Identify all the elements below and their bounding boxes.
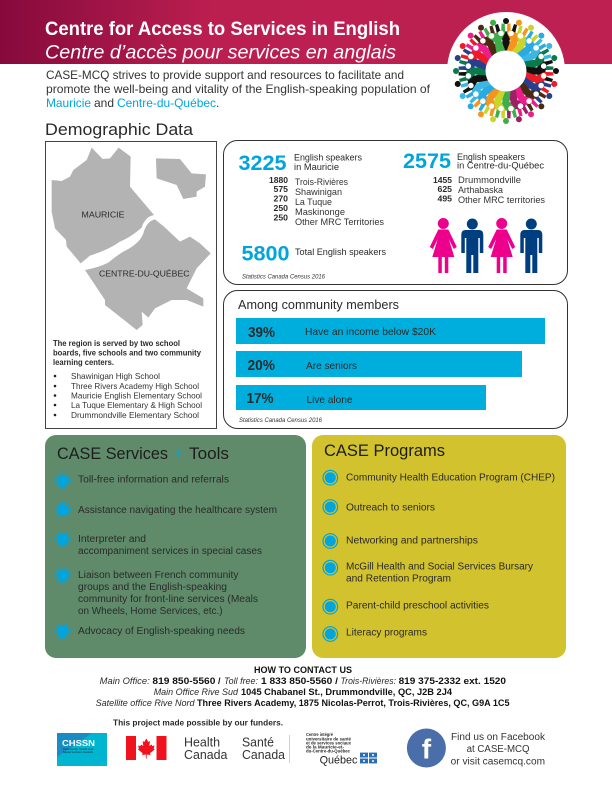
intro text: Centre-du-Québec bbox=[117, 96, 216, 110]
source note: Statistics Canada Census 2016 bbox=[239, 417, 322, 424]
stat: 2575 Centre-du-Québec: 2575 bbox=[403, 149, 451, 173]
list: schools bbox=[54, 371, 202, 420]
stat: 3225 Mauricie: 250 bbox=[274, 203, 288, 213]
item: interpreter: accompaniment services in special cases bbox=[78, 546, 262, 557]
item: toll-free: Toll-free information and referrals bbox=[78, 475, 229, 486]
list: schools: Drummondville Elementary School bbox=[71, 410, 199, 420]
logo: CIUSSS Québec: de la Mauricie-et- bbox=[306, 745, 345, 750]
contact block: Main Office Rive Sud bbox=[154, 687, 239, 697]
stat: 5800 total: 5800 bbox=[242, 242, 290, 266]
text: school boards note: learning centers. bbox=[53, 357, 114, 367]
stat: 2575 Centre-du-Québec: 495 bbox=[438, 194, 452, 204]
map: Mauricie and Centre-du-Québec: MAURICIE bbox=[82, 210, 125, 220]
intro text: CASE-MCQ strives to provide support and resources to facilitate and bbox=[46, 68, 404, 82]
item: networking: Networking and partnerships bbox=[346, 536, 478, 547]
heading: demographic data: Demographic Data bbox=[45, 121, 194, 139]
text: school boards note bbox=[53, 338, 201, 367]
item: toll-free bbox=[55, 473, 229, 489]
item: interpreter bbox=[55, 531, 262, 557]
list: schools: Shawinigan High School bbox=[71, 371, 160, 381]
stat: 3225 Mauricie: 3225 bbox=[238, 151, 287, 175]
logo: CIUSSS Québec: du-Centre-du-Québec bbox=[306, 749, 351, 754]
source note: Statistics Canada Census 2016 bbox=[242, 274, 325, 280]
heading: CASE programs: CASE Programs bbox=[324, 442, 445, 460]
item: navigation: Assistance navigating the healthcare system bbox=[78, 505, 277, 516]
list: schools: La Tuque Elementary & High School bbox=[71, 400, 202, 410]
contact block: 819 375-2332 ext. 1520 bbox=[399, 676, 506, 686]
stat: 2575 Centre-du-Québec bbox=[403, 149, 545, 206]
panel: CASE programs bbox=[312, 435, 566, 658]
item: literacy bbox=[323, 627, 427, 641]
logo: ring of people bbox=[447, 12, 565, 130]
Facebook contact text: or visit casemcq.com bbox=[451, 756, 545, 767]
item: McGill bursary: and Retention Program bbox=[346, 574, 451, 585]
text: school boards note: boards, five schools and two community bbox=[53, 348, 201, 358]
intro text bbox=[46, 68, 431, 110]
header band bbox=[0, 0, 612, 64]
logo: CIUSSS Québec: universitaire de santé bbox=[306, 736, 352, 741]
item: outreach bbox=[323, 500, 435, 514]
logo: CHSSN: Community Health and bbox=[63, 748, 94, 751]
heading: among community members: Among community members bbox=[238, 297, 399, 312]
bar: seniors: Are seniors bbox=[306, 360, 357, 372]
item: CHEP bbox=[323, 470, 555, 485]
intro text: and bbox=[94, 96, 114, 110]
bar: live alone: 17% bbox=[246, 390, 274, 407]
item: navigation bbox=[55, 502, 277, 518]
heading: CASE services + tools: Tools bbox=[189, 445, 229, 463]
logo: Health Canada: Health bbox=[184, 734, 220, 750]
icon: Facebook bbox=[407, 728, 446, 768]
contact block: Satellite office Rive Nord bbox=[96, 698, 196, 708]
item: liaison bbox=[55, 567, 258, 617]
icon: man bbox=[461, 218, 483, 273]
stat: 2575 Centre-du-Québec: Drummondville bbox=[458, 175, 521, 186]
icon: woman bbox=[430, 218, 457, 273]
stat: 2575 Centre-du-Québec: in Centre-du-Québec bbox=[457, 160, 545, 170]
title: Centre for Access to Services in English bbox=[45, 19, 400, 40]
stat: 5800 total: Total English speakers bbox=[295, 247, 386, 257]
stat: 3225 Mauricie: in Mauricie bbox=[294, 162, 339, 172]
item: advocacy bbox=[55, 623, 245, 639]
title bbox=[45, 19, 400, 64]
stat: 3225 Mauricie: 1880 bbox=[269, 175, 288, 185]
stat: 3225 Mauricie: Shawinigan bbox=[295, 187, 342, 198]
item: liaison: groups and the English-speaking bbox=[78, 582, 227, 593]
stat: 3225 Mauricie: 250 bbox=[274, 212, 288, 222]
bar: income below 20K: Have an income below $20K bbox=[305, 326, 436, 338]
text: school boards note: The region is served by two school bbox=[53, 338, 180, 348]
logo: CIUSSS Québec: et de services sociaux bbox=[306, 741, 352, 746]
funders heading: This project made possible by our funders. bbox=[113, 718, 283, 728]
item: literacy: Literacy programs bbox=[346, 628, 427, 639]
item: preschool: Parent-child preschool activities bbox=[346, 601, 489, 612]
icon: woman bbox=[488, 218, 515, 273]
logo: CHSSN bbox=[57, 733, 107, 766]
icon: Facebook: f bbox=[422, 734, 432, 764]
logo: Health Canada bbox=[184, 734, 290, 763]
map: Mauricie and Centre-du-Québec bbox=[52, 148, 211, 330]
item: liaison: on Wheels, Home Services, etc.) bbox=[78, 606, 222, 617]
stat: 2575 Centre-du-Québec: English speakers bbox=[457, 152, 525, 162]
stat: 2575 Centre-du-Québec: Arthabaska bbox=[458, 185, 504, 196]
contact block: / bbox=[218, 676, 221, 686]
list: schools: Mauricie English Elementary School bbox=[71, 390, 202, 400]
logo: Health Canada: Santé bbox=[242, 734, 274, 750]
stat: 2575 Centre-du-Québec: 625 bbox=[438, 184, 452, 194]
stat: 3225 Mauricie: Trois-Rivières bbox=[295, 177, 348, 188]
contact block: Three Rivers Academy, 1875 Nicolas-Perrot, Trois-Rivières, QC, G9A 1C5 bbox=[197, 698, 510, 708]
contact block: 819 850-5560 bbox=[152, 676, 215, 686]
logo: CIUSSS Québec: Québec bbox=[320, 754, 358, 766]
panel: region map and schools bbox=[46, 142, 216, 428]
Facebook contact text: Find us on Facebook bbox=[451, 732, 546, 743]
stat: 3225 Mauricie: Other MRC Territories bbox=[295, 217, 384, 228]
item: liaison: community for front-line services (Meals bbox=[78, 594, 258, 605]
item: preschool bbox=[323, 599, 489, 614]
bar: live alone bbox=[236, 385, 486, 410]
list: schools: Three Rivers Academy High School bbox=[71, 381, 199, 391]
stat: 2575 Centre-du-Québec: 1455 bbox=[433, 175, 452, 185]
contact block bbox=[96, 665, 509, 708]
item: CHEP: Community Health Education Program (CHEP) bbox=[346, 473, 555, 484]
bar: seniors bbox=[236, 351, 522, 377]
Facebook contact text bbox=[451, 732, 546, 767]
contact block: Toll free: bbox=[224, 676, 258, 686]
bar: income below 20K bbox=[236, 318, 545, 344]
item: liaison: Liaison between French community bbox=[78, 570, 238, 581]
stat: 3225 Mauricie: English speakers bbox=[294, 152, 362, 162]
logo: CIUSSS Québec: Centre intégré bbox=[306, 732, 334, 737]
item: advocacy: Advocacy of English-speaking needs bbox=[78, 626, 245, 637]
Facebook contact text: at CASE-MCQ bbox=[467, 744, 530, 755]
stat: 5800 total bbox=[242, 242, 386, 266]
item: McGill bursary: McGill Health and Social Services Bursary bbox=[346, 562, 533, 573]
logo: CHSSN: CHSSN bbox=[62, 738, 95, 748]
logo: CIUSSS Québec bbox=[306, 732, 377, 766]
intro text: . bbox=[216, 96, 219, 110]
item: McGill bursary bbox=[323, 560, 533, 585]
heading: CASE services + tools: CASE Services bbox=[57, 445, 168, 463]
bar: live alone: Live alone bbox=[306, 394, 353, 406]
stat: 3225 Mauricie: Maskinonge bbox=[295, 207, 345, 218]
map: Mauricie and Centre-du-Québec: CENTRE-DU-QUÉBEC bbox=[99, 268, 190, 278]
contact block: 1 833 850-5560 / bbox=[261, 676, 339, 686]
contact block: 1045 Chabanel St., Drummondville, QC, J2B 2J4 bbox=[241, 687, 452, 697]
heading: CASE services + tools: + bbox=[174, 445, 184, 463]
logo: Health Canada: Canada bbox=[184, 747, 228, 762]
logo: CHSSN: Social Services Network bbox=[63, 751, 94, 754]
intro text: Mauricie bbox=[46, 96, 91, 110]
stat: 2575 Centre-du-Québec: Other MRC territories bbox=[458, 195, 545, 206]
panel: among community members bbox=[224, 290, 568, 428]
title: Centre d’accès pour services en anglais bbox=[45, 42, 397, 64]
stat: 3225 Mauricie: 575 bbox=[274, 184, 288, 194]
contact block: HOW TO CONTACT US bbox=[254, 665, 352, 675]
stat: 3225 Mauricie: La Tuque bbox=[295, 197, 332, 208]
contact block: Main Office: bbox=[100, 676, 150, 686]
icon: man bbox=[520, 218, 542, 273]
stat: 3225 Mauricie: 270 bbox=[274, 194, 288, 204]
logo: Canadian flag bbox=[126, 736, 166, 760]
contact block: Trois-Rivières: bbox=[340, 676, 396, 686]
item: outreach: Outreach to seniors bbox=[346, 503, 435, 514]
heading: CASE services + tools bbox=[57, 445, 229, 463]
bar: income below 20K: 39% bbox=[248, 324, 275, 341]
item: interpreter: Interpreter and bbox=[78, 534, 146, 545]
logo: Health Canada: Canada bbox=[242, 747, 286, 762]
intro text: promote the well-being and vitality of the English-speaking population of bbox=[46, 82, 431, 96]
panel: CASE services and tools bbox=[45, 435, 306, 658]
panel: English speakers statistics bbox=[224, 140, 568, 284]
item: networking bbox=[323, 534, 478, 548]
stat: 3225 Mauricie bbox=[238, 151, 384, 228]
bar: seniors: 20% bbox=[248, 357, 275, 374]
